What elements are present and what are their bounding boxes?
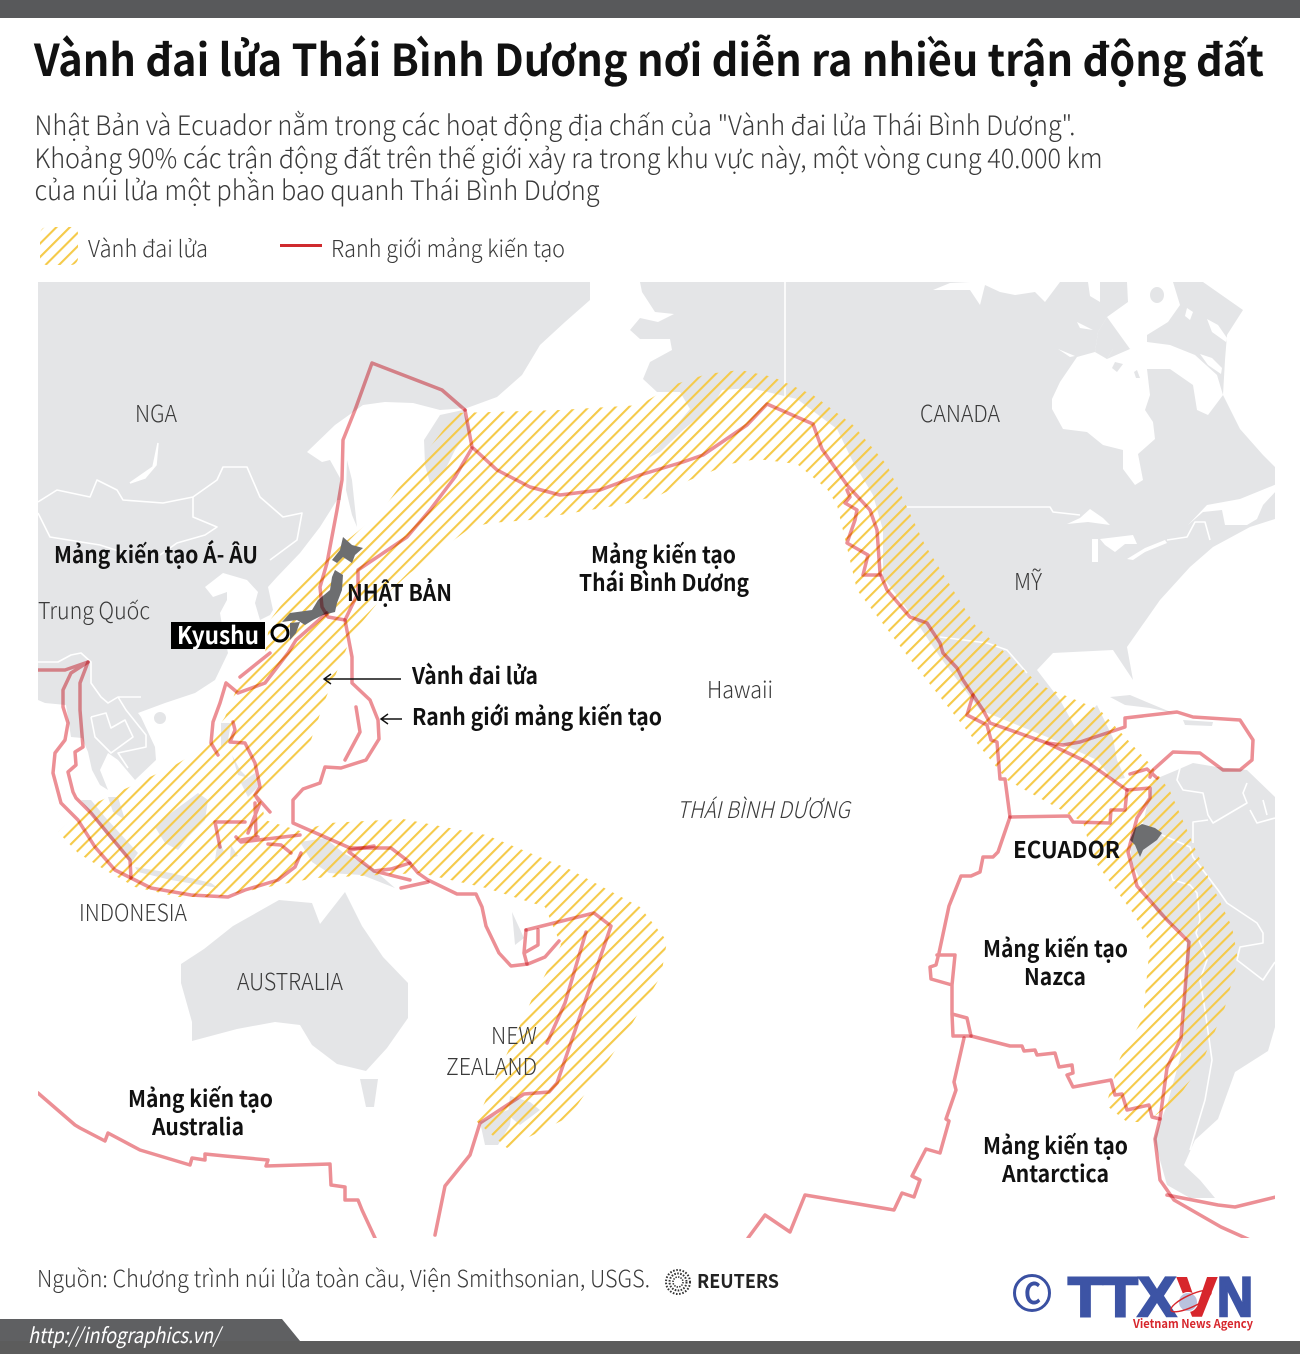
plate labels: Nazca [1024,958,1086,992]
callout: plate boundary arrow: Ranh giới mảng kiến tạo [412,698,662,732]
country labels: ZEALAND [446,1048,537,1082]
TTXVN logo: TTX [1068,1265,1176,1328]
callout: ring of fire arrow [324,657,538,691]
country labels: MỸ [1014,563,1042,597]
land: South America [1130,763,1280,1198]
Ecuador [1130,824,1162,857]
plate labels: Australia [151,1108,244,1142]
copyright icon [1014,1269,1050,1313]
country labels: INDONESIA [79,894,187,928]
callout: Kyushu: Kyushu [177,616,259,651]
map [38,282,1280,1240]
plate labels: Mảng kiến tạo [983,930,1128,964]
land: North America [630,282,1280,780]
source text: Nguồn: Chương trình núi lửa toàn cầu, Viện Smithsonian, USGS. [37,1260,650,1294]
plate labels: Mảng kiến tạo Á- ÂU [54,536,258,570]
plate labels: Thái Bình Dương [579,564,749,598]
TTXVN logo [1068,1265,1253,1332]
country labels: NEW [491,1017,537,1051]
Japan [282,537,363,640]
land: Asia [38,282,590,888]
intro text: Nhật Bản và Ecuador nằm trong các hoạt động địa chấn của "Vành đai lửa Thái Bình Dương". [34,104,1076,143]
ring of fire hatch band [58,370,1238,1148]
Hudson Bay and Hudson Strait [1052,342,1223,485]
label: Ecuador: ECUADOR [1013,831,1120,865]
copyright icon: C [1024,1269,1041,1313]
TTXVN logo: N [1217,1265,1253,1328]
intro text: của núi lửa một phần bao quanh Thái Bình Dương [34,169,600,208]
country labels: Hawaii [707,671,773,705]
country labels: Trung Quốc [38,592,150,626]
legend swatch: plate boundary [280,244,322,247]
TTXVN logo: V [1177,1265,1217,1328]
Reuters logo [666,1267,779,1294]
callout: ring of fire arrow: Vành đai lửa [411,657,538,691]
label: Japan: NHẬT BẢN [347,574,452,608]
country labels: AUSTRALIA [237,963,343,997]
website url: http://infographics.vn/ [28,1320,224,1350]
title: Vành đai lửa Thái Bình Dương nơi diễn ra nhiều trận động đất [33,25,1264,89]
legend label: ring of fire: Vành đai lửa [88,230,208,264]
TTXVN logo: Vietnam News Agency [1132,1315,1253,1332]
intro text: Khoảng 90% các trận động đất trên thế giới xảy ra trong khu vực này, một vòng cung 40.000 km [34,137,1102,176]
plate labels: Mảng kiến tạo [128,1080,273,1114]
top bar [0,0,1300,18]
plate labels: Antarctica [1001,1155,1109,1189]
Reuters logo: REUTERS [697,1267,779,1294]
Foxe Basin [1107,282,1180,349]
plate labels [54,536,1128,1189]
legend label: plate boundary: Ranh giới mảng kiến tạo [331,230,565,264]
legend [40,227,565,265]
legend swatch: ring of fire hatch [40,227,78,265]
country labels: THÁI BÌNH DƯƠNG [677,791,852,825]
country labels [38,395,1042,1082]
country labels: NGA [135,395,177,429]
plate labels: Mảng kiến tạo [983,1127,1128,1161]
country labels: CANADA [920,395,1000,429]
plate boundaries [38,363,1280,1240]
intro text [34,104,1102,208]
footer bar [0,1319,1300,1354]
land: Australia and New Zealand [181,892,540,1145]
plate labels: Mảng kiến tạo [591,536,736,570]
